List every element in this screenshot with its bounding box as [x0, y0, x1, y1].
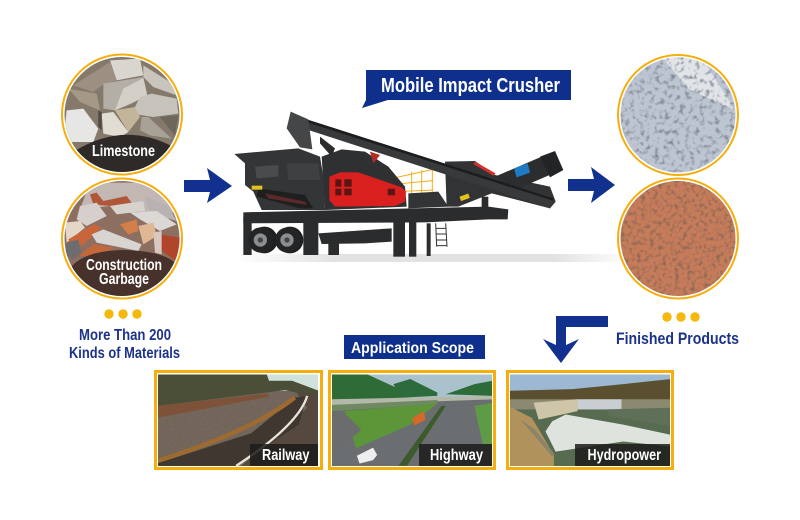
label: Limestone: Limestone [92, 143, 155, 160]
caption: more than 200 kinds of materials [69, 327, 180, 362]
arrow: materials to crusher [184, 168, 232, 203]
label: Railway: Railway [262, 447, 310, 464]
photo card: hydropower [508, 372, 672, 468]
machine: mobile impact crusher [234, 112, 563, 257]
rear hopper [234, 148, 325, 210]
photo card: highway [330, 372, 494, 468]
photo card: railway [156, 372, 322, 468]
arrow: products to applications [543, 316, 608, 363]
caption: more than 200 kinds of materials: Kinds of Materials [69, 345, 180, 362]
ground shadow [235, 254, 635, 262]
right screen conveyor [445, 161, 556, 208]
frame and legs [243, 197, 508, 257]
heading: Application Scope: Application Scope [351, 340, 474, 357]
arrow: crusher to products [568, 167, 615, 203]
crusher body [322, 149, 407, 210]
dots: left [104, 309, 142, 319]
blue motor [514, 163, 530, 177]
ladder [436, 223, 447, 247]
dots: right [662, 312, 700, 322]
red guard [329, 172, 406, 207]
label: Construction Garbage: Construction [86, 257, 162, 274]
material photo: construction garbage [60, 176, 185, 301]
label: Highway [419, 444, 492, 466]
label: Hydropower [575, 444, 670, 466]
main conveyor [303, 119, 553, 208]
product photo: red sand [618, 178, 738, 298]
label: Highway: Highway [430, 447, 483, 464]
material photo: limestone [60, 52, 185, 177]
caption: finished products: Finished Products [616, 330, 739, 348]
label: Railway [250, 444, 318, 466]
wheels [248, 227, 303, 253]
label: Hydropower: Hydropower [588, 447, 661, 464]
material photo: construction garbage: Garbage [99, 271, 149, 288]
heading: Application Scope [344, 335, 485, 359]
product photo: gravel [618, 55, 738, 175]
caption: more than 200 kinds of materials: More Than 200 [79, 327, 171, 344]
yellow service platform [397, 169, 433, 203]
title: Mobile Impact Crusher [362, 70, 571, 108]
title: Mobile Impact Crusher: Mobile Impact Crusher [381, 75, 560, 97]
